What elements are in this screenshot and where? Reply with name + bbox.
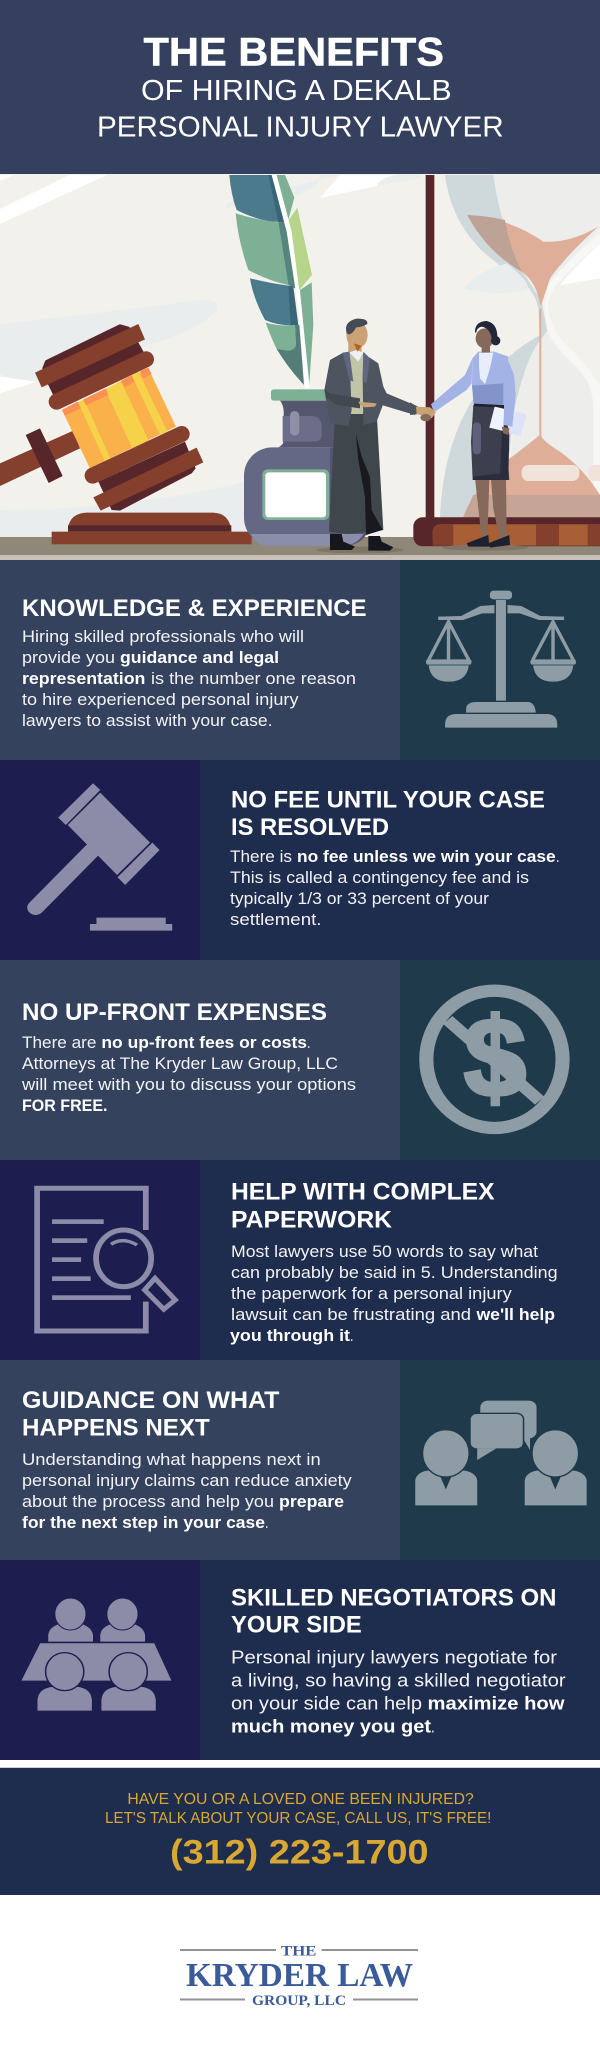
body text: settlement.: [230, 910, 322, 929]
heading: PAPERWORK: [231, 1207, 393, 1234]
logo: The Kryder Law Group, LLC: THE: [281, 1944, 316, 1960]
heading: IS RESOLVED: [231, 814, 389, 841]
heading: SKILLED NEGOTIATORS ON: [231, 1584, 556, 1611]
body text: provide you: [22, 648, 115, 667]
heading: HELP WITH COMPLEX: [231, 1179, 494, 1206]
call to action text: HAVE YOU OR A LOVED ONE BEEN INJURED?: [127, 1791, 474, 1808]
body text: .: [431, 1716, 435, 1737]
body text: This is called a contingency fee and is: [230, 868, 529, 887]
body text: much money you get: [231, 1716, 431, 1737]
body text: Most lawyers use 50 words to say what: [231, 1242, 538, 1261]
heading: NO FEE UNTIL YOUR CASE: [231, 786, 545, 814]
body text: lawyers to assist with your case.: [22, 711, 272, 730]
panel: help with complex paperwork: [0, 1160, 600, 1360]
body text: maximize how: [428, 1693, 565, 1714]
body text: .: [265, 1513, 268, 1532]
panel: skilled negotiators: [0, 1560, 600, 1760]
panel: knowledge and experience: [0, 560, 600, 760]
icon: gavel: [36, 783, 172, 931]
icon: hourglass: [413, 175, 600, 546]
call to action text: LET'S TALK ABOUT YOUR CASE, CALL US, IT'S FREE!: [105, 1810, 491, 1827]
phone number: (312) 223-1700: [170, 1834, 429, 1872]
title: THE BENEFITS: [144, 30, 444, 74]
logo: The Kryder Law Group, LLC: GROUP, LLC: [252, 1993, 346, 2009]
body text: a living, so having a skilled negotiator: [231, 1670, 566, 1691]
body text: Hiring skilled professionals who will: [22, 627, 304, 646]
subtitle: OF HIRING A DEKALB: [141, 75, 452, 107]
icon: scales of justice: [426, 591, 576, 728]
icon: two people talking: [415, 1401, 587, 1505]
body text: There are: [22, 1033, 96, 1052]
icon: no dollar sign: [426, 991, 563, 1128]
body text: representation: [22, 669, 145, 688]
body text: There is: [230, 847, 292, 866]
icon: gavel and block: [0, 324, 252, 544]
illustration: gavel, quill, handshake, hourglass: [0, 174, 600, 560]
icon: handshake: [410, 402, 436, 421]
body text: we'll help: [475, 1305, 555, 1324]
body text: you through it: [230, 1326, 350, 1345]
header banner: [0, 0, 600, 174]
body text: .: [556, 847, 560, 866]
body text: typically 1/3 or 33 percent of your: [230, 889, 489, 908]
body text: no up-front fees or costs: [101, 1033, 307, 1052]
body text: is the number one reason: [151, 669, 356, 688]
icon: woman with papers: [431, 321, 528, 551]
logo: The Kryder Law Group, LLC: KRYDER LAW: [186, 1957, 413, 1994]
icon: negotiating table: [21, 1598, 171, 1711]
body text: Attorneys at The Kryder Law Group, LLC: [22, 1054, 338, 1073]
body text: will meet with you to discuss your options: [21, 1075, 356, 1094]
subtitle: PERSONAL INJURY LAWYER: [97, 111, 504, 143]
ground: [0, 537, 600, 560]
heading: GUIDANCE ON WHAT: [22, 1387, 280, 1414]
body text: prepare: [279, 1492, 344, 1511]
body text: about the process and help you: [22, 1492, 274, 1511]
panel: no up-front expenses: [0, 960, 600, 1160]
body text: guidance and legal: [120, 648, 279, 667]
body text: personal injury claims can reduce anxiety: [22, 1471, 352, 1490]
body text: can probably be said in 5. Understanding: [231, 1263, 558, 1282]
heading: HAPPENS NEXT: [22, 1415, 210, 1442]
body text: on your side can help: [231, 1693, 422, 1714]
body text: lawsuit can be frustrating and: [231, 1305, 471, 1324]
body text: for the next step in your case: [22, 1513, 265, 1532]
body text: .: [350, 1326, 354, 1345]
heading: YOUR SIDE: [231, 1612, 362, 1639]
icon: ink bottle: [244, 389, 370, 546]
body text: to hire experienced personal injury: [22, 690, 299, 709]
icon: quill feather: [229, 175, 313, 388]
icon: document with magnifier: [37, 1188, 175, 1331]
panel: guidance on what happens next: [0, 1360, 600, 1560]
body text: .: [307, 1033, 310, 1052]
heading: KNOWLEDGE & EXPERIENCE: [22, 595, 367, 622]
call to action banner: [0, 1767, 600, 1895]
body text: Understanding what happens next in: [22, 1450, 321, 1469]
body text: the paperwork for a personal injury: [231, 1284, 512, 1303]
body text: FOR FREE.: [22, 1096, 108, 1115]
heading: NO UP-FRONT EXPENSES: [22, 999, 327, 1026]
body text: Personal injury lawyers negotiate for: [231, 1647, 557, 1668]
logo: The Kryder Law Group, LLC: [180, 1944, 418, 2009]
icon: businessman: [317, 319, 418, 553]
panel: no fee until resolved: [0, 760, 600, 960]
icon: no dollar sign: $: [464, 995, 526, 1120]
body text: no fee unless we win your case: [297, 847, 556, 866]
